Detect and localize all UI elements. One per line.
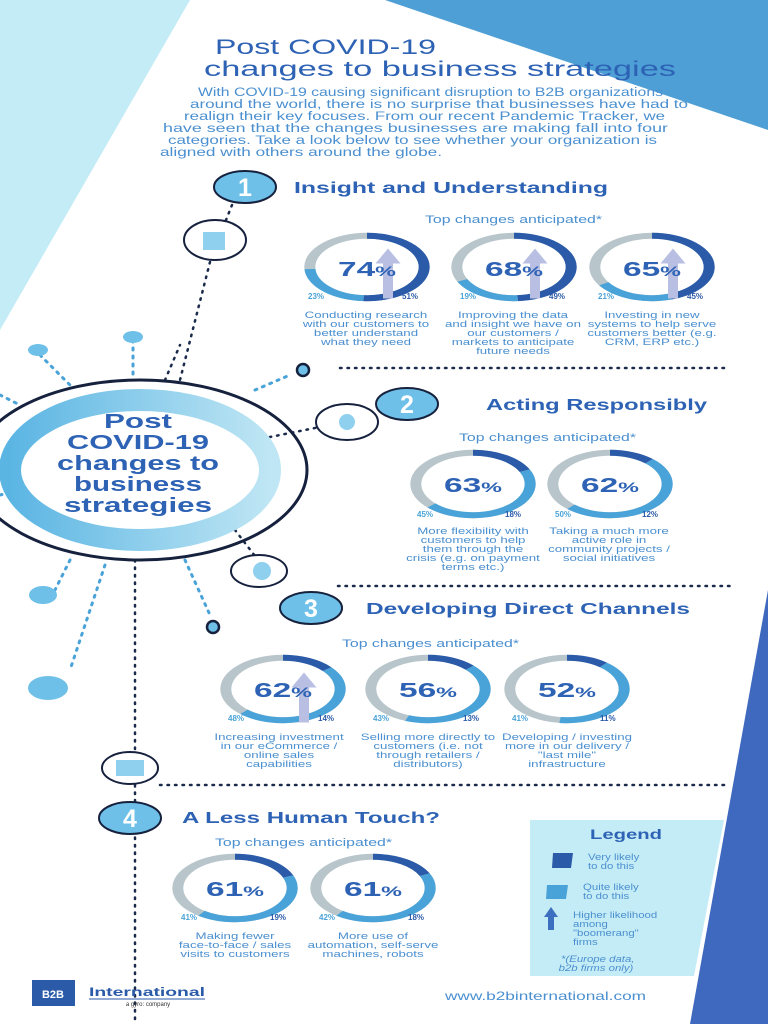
text: 18% (408, 913, 424, 922)
captions: customers to help (421, 536, 525, 545)
icon circles (102, 220, 378, 784)
text: 13% (463, 714, 479, 723)
legend: *(Europe data, (561, 955, 634, 965)
donut values: 62 % (254, 680, 313, 702)
title (204, 36, 676, 81)
captions: systems to help serve (588, 320, 716, 329)
captions: automation, self-serve (308, 941, 438, 950)
logo: a gyro: company (126, 1002, 170, 1008)
captions: community projects / (548, 545, 671, 554)
text: 3 (304, 595, 318, 623)
big circle: strategies (64, 495, 212, 517)
legend: firms (573, 938, 598, 948)
donut values: 62 % (581, 475, 640, 497)
logo (32, 980, 205, 1008)
arrows (292, 248, 686, 722)
big circle: business (74, 474, 202, 496)
intro text: around the world, there is no surprise that businesses have had to (190, 97, 688, 111)
captions: with our customers to (302, 320, 429, 329)
captions: infrastructure (528, 760, 606, 769)
donut values: 65 % (623, 259, 682, 281)
text: 50% (555, 510, 571, 519)
text: 18% (505, 510, 521, 519)
section headings: Developing Direct Channels (366, 601, 690, 618)
text: 14% (318, 714, 334, 723)
text: 41% (181, 913, 197, 922)
donuts (178, 236, 709, 919)
legend: to do this (583, 892, 629, 902)
intro text: have seen that the changes businesses are making fall into four (163, 121, 668, 135)
captions: Making fewer (195, 932, 275, 941)
text: 51% (402, 292, 418, 301)
text: 43% (373, 714, 389, 723)
intro text: categories. Take a look below to see whether your organization is (168, 133, 657, 147)
legend: Very likely (588, 853, 640, 863)
text: Top changes anticipated* (425, 214, 603, 226)
text: 19% (270, 913, 286, 922)
captions: social initiatives (563, 554, 655, 563)
text: 48% (228, 714, 244, 723)
captions: distributors) (393, 760, 463, 769)
text: Top changes anticipated* (459, 432, 637, 444)
captions: machines, robots (322, 950, 424, 959)
donut values: 61 % (206, 879, 265, 901)
big circle: Post (104, 411, 173, 433)
decorative dots (28, 331, 309, 700)
text: Top changes anticipated* (342, 638, 520, 650)
text: 11% (600, 714, 616, 723)
intro text: With COVID-19 causing significant disruption to B2B organizations (198, 85, 663, 99)
text: 23% (308, 292, 324, 301)
section headings: Acting Responsibly (486, 397, 707, 414)
captions: Conducting research (305, 311, 427, 320)
captions: what they need (320, 338, 411, 347)
text: 2 (400, 391, 414, 419)
captions: customers (i.e. not (373, 742, 484, 751)
captions: Taking a much more (549, 527, 669, 536)
section headings: A Less Human Touch? (182, 810, 440, 827)
section headings: Insight and Understanding (294, 180, 608, 197)
website: www.b2binternational.com (444, 989, 646, 1003)
text: Top changes anticipated* (215, 837, 393, 849)
text: 49% (549, 292, 565, 301)
intro text: realign their key focuses. From our recent Pandemic Tracker, we (184, 109, 665, 123)
donut values: 56 % (399, 680, 458, 702)
text: 45% (687, 292, 703, 301)
text: 21% (598, 292, 614, 301)
captions: online sales (244, 751, 314, 760)
legend: Quite likely (583, 883, 640, 893)
captions: terms etc.) (442, 563, 505, 572)
captions: more in our delivery / (505, 742, 630, 751)
legend: Legend (590, 826, 662, 842)
text: 41% (512, 714, 528, 723)
text: 42% (319, 913, 335, 922)
captions: visits to customers (180, 950, 290, 959)
captions: through retailers / (376, 751, 481, 760)
big circle: changes to (57, 453, 219, 475)
donut values: 74 % (338, 259, 397, 281)
text: 4 (123, 805, 137, 833)
donut values (206, 259, 682, 901)
captions: and insight we have on (445, 320, 581, 329)
captions: better understand (314, 329, 418, 338)
intro text: aligned with others around the globe. (160, 145, 442, 159)
captions: More use of (338, 932, 409, 941)
captions: them through the (423, 545, 523, 554)
captions: More flexibility with (417, 527, 529, 536)
text: 12% (642, 510, 658, 519)
big circle (0, 380, 307, 560)
donut values: 68 % (485, 259, 544, 281)
captions: in our eCommerce / (221, 742, 338, 751)
text: 19% (460, 292, 476, 301)
legend: Higher likelihood (573, 911, 657, 921)
big circle: COVID-19 (67, 432, 209, 454)
captions: Increasing investment (214, 733, 345, 742)
captions: "last mile" (538, 751, 596, 760)
legend (530, 820, 724, 976)
donut values: 61 % (344, 879, 403, 901)
captions: Improving the data (458, 311, 569, 320)
captions: Selling more directly to (361, 733, 495, 742)
title: changes to business strategies (204, 58, 676, 81)
captions: crisis (e.g. on payment (406, 554, 541, 563)
text: 45% (417, 510, 433, 519)
captions: future needs (476, 347, 550, 356)
legend: "boomerang" (573, 929, 639, 939)
captions: capabilities (246, 760, 312, 769)
badges (99, 171, 438, 834)
captions: CRM, ERP etc.) (605, 338, 699, 347)
legend: to do this (588, 862, 634, 872)
donut values: 52 % (538, 680, 597, 702)
logo: International (89, 985, 205, 999)
logo: B2B (42, 989, 64, 1001)
captions: face-to-face / sales (179, 941, 291, 950)
dotted connectors (135, 205, 730, 1024)
donut values: 63 % (444, 475, 503, 497)
captions: customers better (e.g. (587, 329, 717, 338)
captions: active role in (572, 536, 646, 545)
title: Post COVID-19 (215, 36, 436, 59)
captions: Developing / investing (502, 733, 632, 742)
captions: markets to anticipate (452, 338, 574, 347)
captions: our customers / (467, 329, 560, 338)
captions: Investing in new (604, 311, 700, 320)
captions (179, 311, 717, 959)
intro text (160, 85, 688, 159)
section headings (182, 180, 707, 827)
legend: b2b firms only) (559, 964, 633, 974)
legend: among (573, 920, 608, 930)
text: 1 (238, 174, 252, 202)
